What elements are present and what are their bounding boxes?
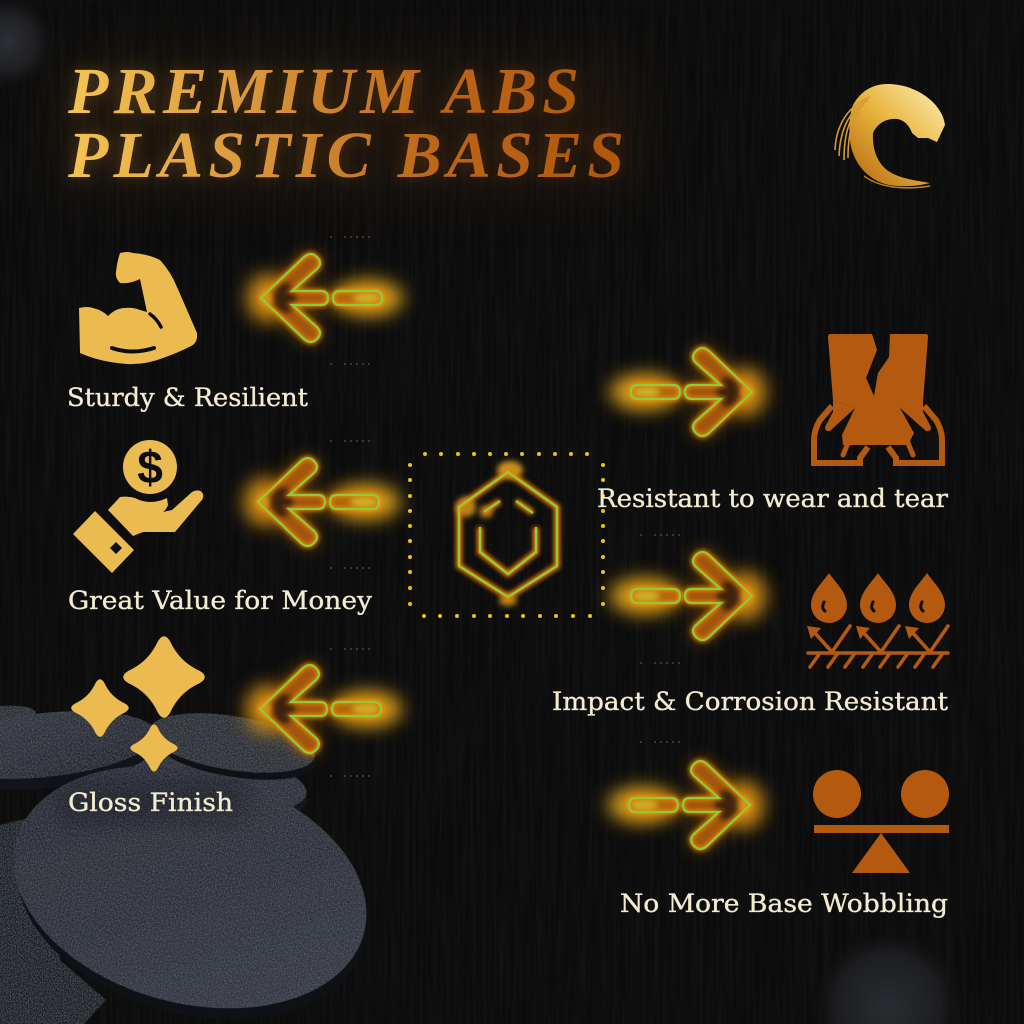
plastic bases photo [0, 701, 394, 1024]
icon: muscle [79, 252, 197, 364]
coin: $ [137, 441, 163, 493]
arrow: impact [610, 552, 766, 640]
hexagon glow [456, 461, 557, 606]
arrow: sturdy [247, 254, 403, 342]
title [67, 55, 624, 192]
label: value: Great Value for Money [68, 586, 373, 615]
hexagon lines [459, 472, 557, 597]
icon: cracked block held by hands [814, 334, 942, 463]
cuff [73, 511, 134, 573]
label: wear: Resistant to wear and tear [597, 484, 948, 513]
hand [108, 490, 203, 536]
label: impact: Impact & Corrosion Resistant [552, 687, 948, 716]
arrow: wear [610, 348, 766, 436]
dotted frame [408, 452, 605, 618]
label: gloss: Gloss Finish [68, 788, 233, 817]
decorative dotted ticks [330, 237, 680, 776]
arrow: value [244, 458, 400, 546]
arrow: gloss [246, 665, 402, 753]
arrow: wobble [608, 761, 764, 849]
title: PLASTIC BASES [67, 119, 624, 192]
center chemical hexagon icon [408, 452, 605, 618]
label: sturdy: Sturdy & Resilient [67, 383, 308, 412]
icon: water drops and corrosion arrows [807, 573, 948, 667]
label: wobble: No More Base Wobbling [620, 889, 948, 918]
logo: enso brush circle [835, 84, 945, 188]
icon: balance scale [813, 770, 949, 873]
title: PREMIUM ABS [67, 55, 579, 128]
icon: money in hand [73, 440, 203, 573]
icon: sparkles [71, 636, 205, 772]
